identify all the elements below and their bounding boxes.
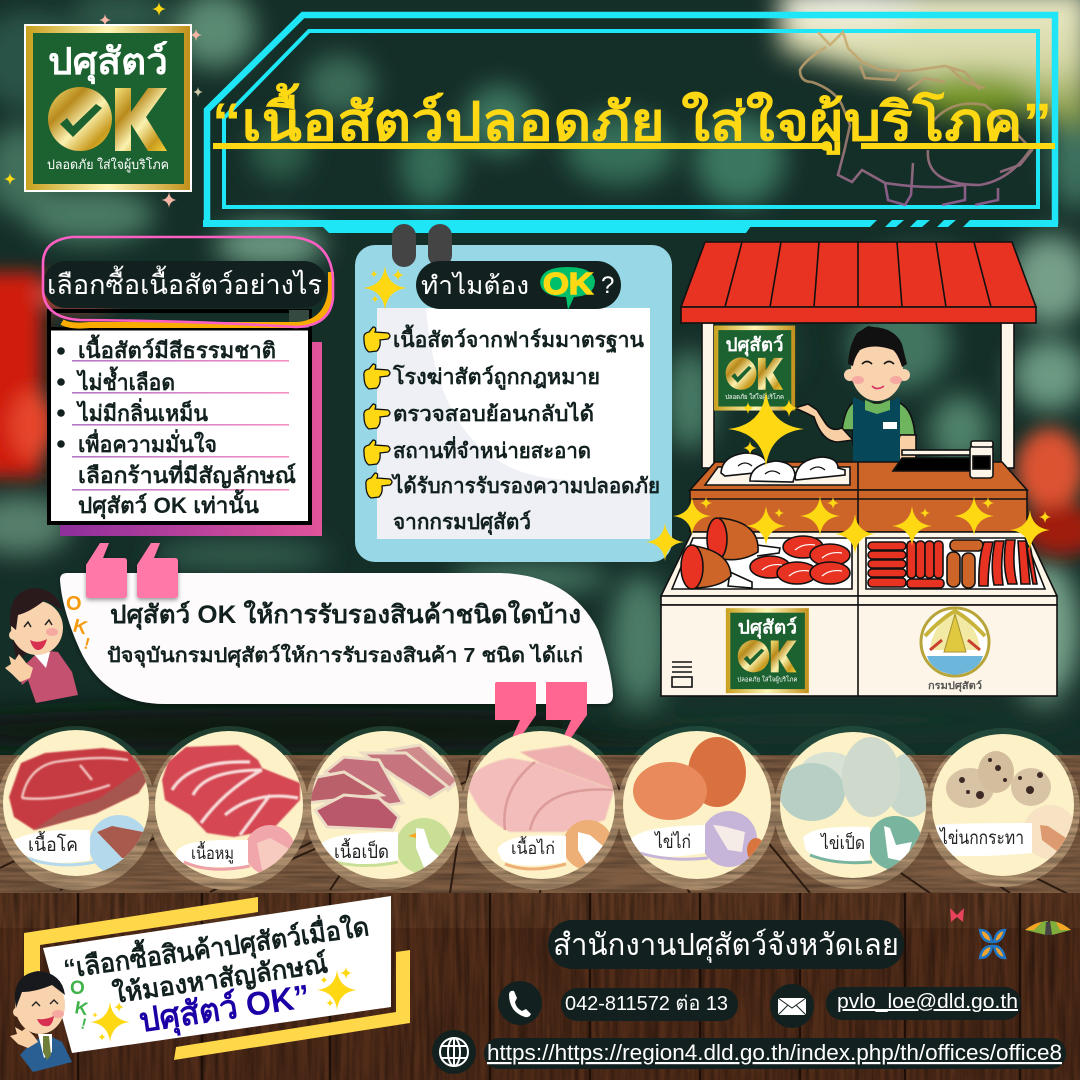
reasons list <box>364 324 660 536</box>
circles: product row <box>3 730 1077 879</box>
stall logo top: ปลอดภัย ใส่ใจผู้บริโภค <box>725 393 784 401</box>
callout: which products <box>60 543 613 738</box>
counter top <box>690 462 1027 532</box>
reasons list: โรงฆ่าสัตว์ถูกกฎหมาย <box>392 364 600 391</box>
man character <box>10 971 72 1072</box>
OK mark: K <box>73 997 90 1019</box>
logo: ปศุสัตว์ OK: ปศุสัตว์ <box>48 41 168 85</box>
heading pill: ทำไมต้อง <box>421 271 529 300</box>
ok mark: O <box>66 593 82 615</box>
logo: ปศุสัตว์ OK <box>24 24 192 192</box>
wooden rims of circles <box>0 755 1080 895</box>
list lines and text: เนื้อสัตว์มีสีธรรมชาติ <box>78 334 276 363</box>
callout: which products: ปัจจุบันกรมปศุสัตว์ให้การรับรองสินค้า 7 ชนิด ได้แก่ <box>107 643 583 668</box>
wood table background <box>0 755 1080 1080</box>
bottom banner <box>10 896 410 1072</box>
ok mark <box>66 593 92 653</box>
hen eggs <box>630 737 765 867</box>
reasons list: จากกรมปศุสัตว์ <box>393 510 531 536</box>
heading pill <box>416 261 621 310</box>
sparkle <box>363 266 407 310</box>
list lines and text: ไม่ช้ำเลือด <box>76 366 175 395</box>
vendor <box>795 326 916 462</box>
duck meat <box>306 745 458 874</box>
OK mark: O <box>70 978 85 999</box>
label: quail eggs: ไข่นกกระทา <box>938 827 1024 849</box>
heading pill <box>43 237 333 327</box>
OK mark: ! <box>79 1015 88 1033</box>
halos behind product circles <box>0 726 1080 894</box>
list lines and text <box>57 334 296 520</box>
binder tabs <box>392 224 452 267</box>
banner line 1: “เลือกซื้อสินค้าปศุสัตว์เมื่อใด <box>61 906 371 986</box>
closing quote <box>495 682 587 738</box>
quail eggs <box>936 751 1077 859</box>
contact heading <box>548 920 904 969</box>
label: pork: เนื้อหมู <box>191 841 234 864</box>
title frame with animal outlines <box>203 15 1058 233</box>
contact: email: pvlo_loe@dld.go.th <box>837 991 1018 1013</box>
reasons list: ตรวจสอบย้อนกลับได้ <box>393 401 594 426</box>
duck eggs <box>779 737 935 870</box>
woman character <box>5 588 92 703</box>
market stall <box>661 242 1057 696</box>
reasons list: ได้รับการรับรองความปลอดภัย <box>391 473 660 498</box>
department seal <box>921 608 989 692</box>
contact: website: https://https://region4.dld.go.th/index.php/th/offices/office8 <box>487 1040 1062 1065</box>
stall logo bottom <box>726 608 809 693</box>
banner line 2: ให้มองหาสัญลักษณ์ <box>111 948 330 1010</box>
opening quote <box>86 543 178 598</box>
decorative logo sparkles <box>4 2 203 208</box>
pink gradient shadow <box>60 342 322 536</box>
stall sparkles <box>646 391 1051 561</box>
list lines and text: ปศุสัตว์ OK เท่านั้น <box>78 489 259 520</box>
banner sparkles <box>90 967 357 1042</box>
panel: how to buy meat <box>43 237 333 536</box>
list lines and text: ไม่มีกลิ่นเหม็น <box>76 397 208 426</box>
stall logo top: ปศุสัตว์ <box>726 333 784 357</box>
label: duck meat: เนื้อเป็ด <box>334 838 389 863</box>
reasons list: เนื้อสัตว์จากฟาร์มมาตรฐาน <box>393 324 645 354</box>
title frame with animal outlines: “เนื้อสัตว์ปลอดภัย ใส่ใจผู้บริโภค” <box>212 83 1052 155</box>
label: duck eggs: ไข่เป็ด <box>819 831 865 853</box>
chicken tray <box>705 453 850 485</box>
beef <box>9 748 149 875</box>
stall logo bottom: ปศุสัตว์ <box>738 616 797 640</box>
hams <box>681 518 780 589</box>
pork <box>162 745 300 875</box>
sausages <box>868 540 1037 588</box>
heading pill: ? <box>601 272 614 299</box>
meat display case <box>661 532 1057 696</box>
label: hen eggs: ไข่ไก่ <box>653 831 691 853</box>
callout: which products: ปศุสัตว์ OK ให้การรับรองสินค้าชนิดใดบ้าง <box>110 599 581 631</box>
label: beef: เนื้อโค <box>28 831 78 856</box>
list box <box>48 310 311 523</box>
department seal: กรมปศุสัตว์ <box>928 680 982 692</box>
animal line art <box>800 32 1032 205</box>
chicken meat <box>467 745 615 870</box>
roof <box>681 242 1036 323</box>
list lines and text: เพื่อความมั่นใจ <box>78 428 217 457</box>
contact: email <box>770 984 1021 1028</box>
ok mark: K <box>71 616 90 639</box>
banner line 3: ปศุสัตว์ OK” <box>137 977 313 1042</box>
panel: why OK <box>355 224 672 562</box>
contact: phone: 042-811572 ต่อ 13 <box>565 993 728 1015</box>
steaks <box>750 536 850 584</box>
reasons list: สถานที่จำหน่ายสะอาด <box>393 435 591 463</box>
small vents <box>672 662 692 687</box>
contact: phone <box>498 981 738 1025</box>
contact heading: สำนักงานปศุสัตว์จังหวัดเลย <box>553 928 899 964</box>
contact: website <box>432 1030 1066 1074</box>
ok mark: ! <box>82 635 92 653</box>
stall logo top <box>714 326 795 411</box>
OK mark <box>70 978 90 1033</box>
stall logo bottom: ปลอดภัย ใส่ใจผู้บริโภค <box>737 675 797 684</box>
butterflies decor <box>950 908 1071 958</box>
list lines and text: เลือกร้านที่มีสัญลักษณ์ <box>78 459 296 489</box>
label: chicken meat: เนื้อไก่ <box>511 836 555 858</box>
logo: ปศุสัตว์ OK: ปลอดภัย ใส่ใจผู้บริโภค <box>47 157 169 173</box>
scale and jar <box>893 441 993 478</box>
heading pill: เลือกซื้อเนื้อสัตว์อย่างไร <box>47 265 322 300</box>
posts <box>702 323 1014 468</box>
heading pill: OK <box>543 266 594 301</box>
